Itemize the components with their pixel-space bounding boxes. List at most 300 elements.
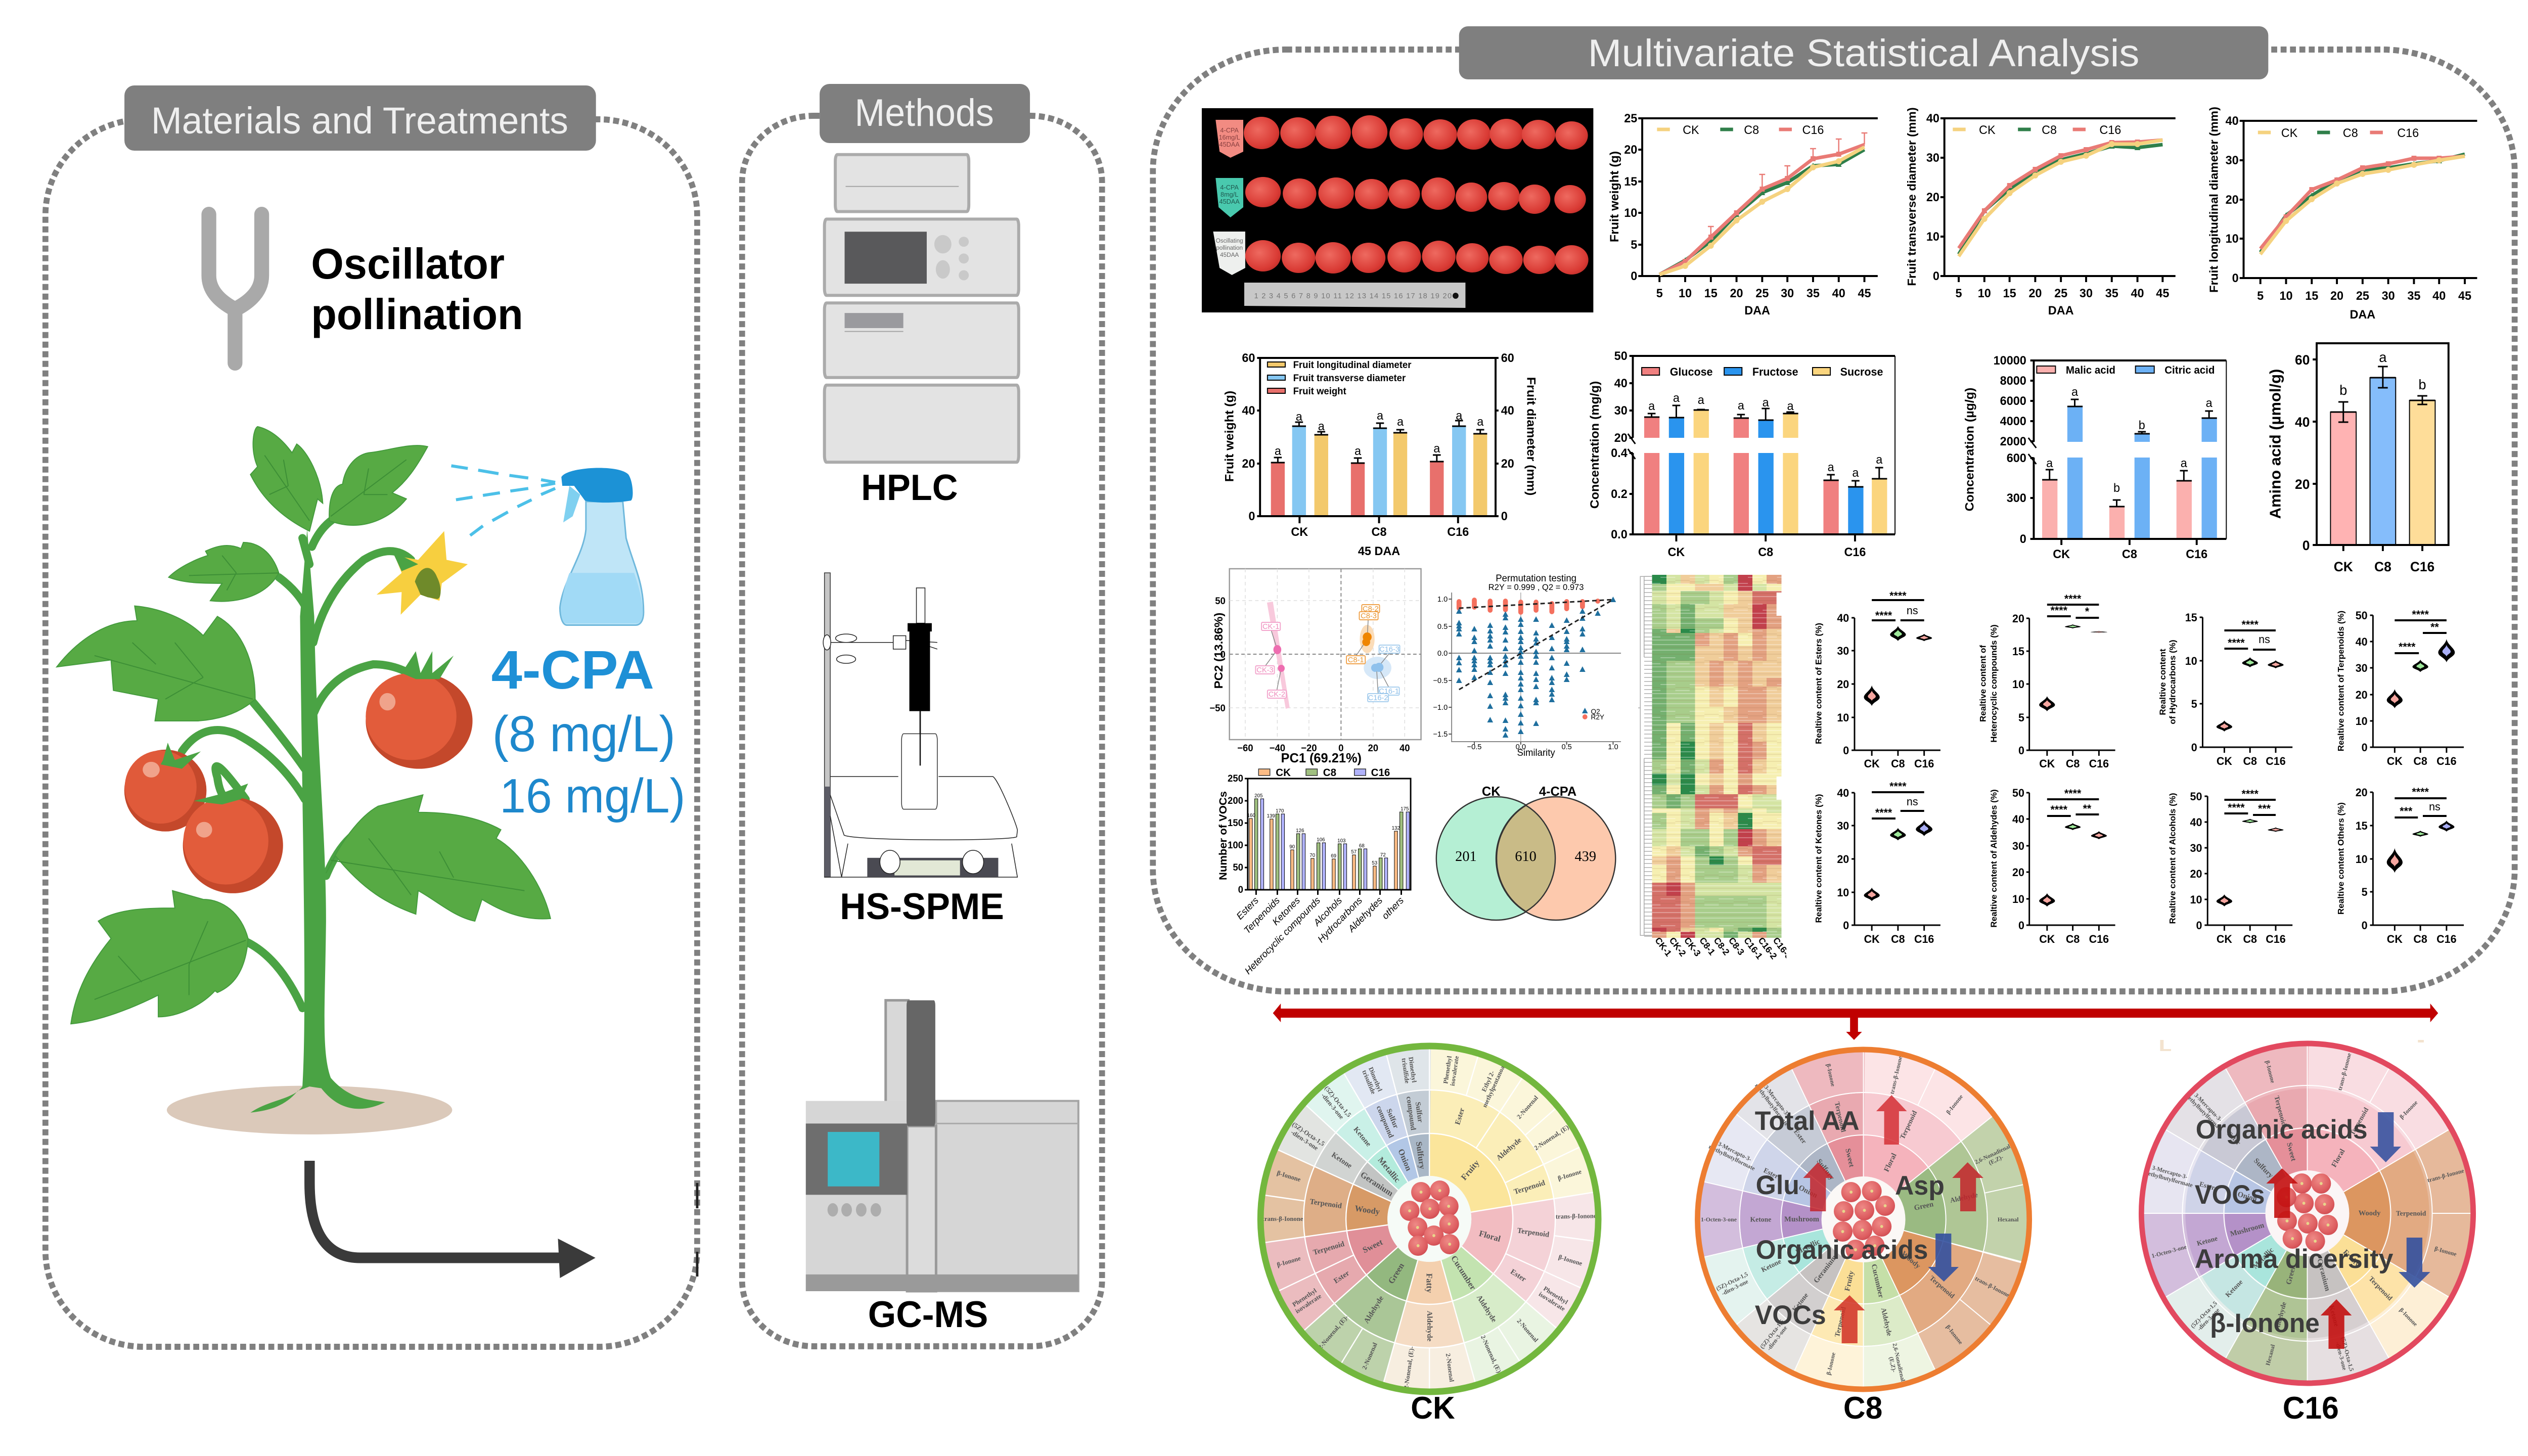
chart: fruit transverse diameter line: 0 xyxy=(1933,270,1939,283)
chart: others violin: ns xyxy=(2429,800,2441,813)
chart: fruit weight line xyxy=(1608,112,1878,317)
chart: esters violin: 0 xyxy=(1843,744,1849,757)
flavor wheel: CK: β-Ionone xyxy=(1557,1168,1583,1182)
chart: PCA scatter: 50 xyxy=(1215,596,1226,606)
chart: terpenoids violin: **** xyxy=(2412,608,2429,621)
flavor wheel: C16: Metallic xyxy=(2251,1246,2275,1270)
chart: 45 DAA fruit size bars: CK xyxy=(1291,526,1308,539)
chart: sugar concentration bars: a xyxy=(1648,400,1655,413)
chart: permutation test xyxy=(1433,573,1621,758)
chart: 45 DAA fruit size bars: a xyxy=(1275,445,1282,458)
flavor wheel: CK: methylpentanoate xyxy=(1481,1060,1508,1109)
text: 4-CPA doses xyxy=(491,639,685,823)
flavor wheel: C16: Onion xyxy=(2237,1190,2258,1204)
chart: VOC count bars: 68 xyxy=(1359,843,1365,849)
chart: sugar concentration bars: 0.2 xyxy=(1611,488,1628,501)
chart: heterocyclic violin: Realtive content of xyxy=(1978,645,1988,722)
chart: sugar concentration bars: 40 xyxy=(1614,377,1628,390)
chart: alcohols violin: **** xyxy=(2228,801,2245,814)
chart: PCA scatter: CK-2 xyxy=(1269,691,1285,699)
chart: ketones violin: 0 xyxy=(1843,919,1849,932)
chart: 45 DAA fruit size bars: 45 DAA xyxy=(1358,545,1400,558)
chart: sugar concentration bars: Glucose xyxy=(1670,366,1712,378)
chart: organic acid bars: b xyxy=(2139,419,2145,432)
chart: fruit longitudinal diameter line: Fruit longitudinal diameter (mm) xyxy=(2208,107,2221,293)
flavor wheel: C16: Ester xyxy=(2198,1180,2216,1192)
chart: PCA scatter: C8-3 xyxy=(1361,612,1377,620)
chart: VOC count bars: 100 xyxy=(1228,840,1243,850)
text: 4-CPA doses: 4-CPA xyxy=(491,639,654,700)
chart: PCA scatter: C8-2 xyxy=(1363,605,1379,613)
flavor wheel: C16: Ketone xyxy=(2224,1278,2244,1299)
chart: 45 DAA fruit size bars: Fruit weight xyxy=(1293,386,1346,396)
chart: aldehydes violin: C16 xyxy=(2089,933,2109,945)
text: oscillator pollination xyxy=(311,240,523,338)
chart: fruit weight line: 10 xyxy=(1679,287,1692,300)
chart: 45 DAA fruit size bars: Fruit longitudinal diameter xyxy=(1293,359,1412,370)
label: HS-SPME: HS-SPME xyxy=(840,886,1004,927)
flavor wheel: C16: trans-β-Ionone xyxy=(2426,1167,2465,1184)
flavor wheel: C8: 2,6-Nonadienal, xyxy=(1974,1142,2013,1166)
flavor wheel: CK: trans-β-Ionone xyxy=(1262,1215,1303,1222)
chart: organic acid bars: C16 xyxy=(2186,548,2207,561)
chart: esters violin: 30 xyxy=(1837,645,1849,657)
chart: fruit transverse diameter line: 40 xyxy=(1926,112,1939,125)
chart: 45 DAA fruit size bars: C16 xyxy=(1447,526,1469,539)
chart: sugar concentration bars: 0.4 xyxy=(1611,447,1628,460)
flavor wheel: CK: Terpenoid xyxy=(1513,1179,1547,1196)
chart: organic acid bars: a xyxy=(2181,457,2188,470)
chart: VOC count bars: Esters xyxy=(1234,895,1260,922)
text: C16 overlay labels: β-Ionone xyxy=(2210,1308,2320,1338)
flavor wheel: CK: (5Z)-Octa-1,5 xyxy=(1291,1121,1326,1148)
flavor wheel: C8: 2,6-Nonadienal, xyxy=(1891,1342,1907,1384)
chart: alcohols violin: **** xyxy=(2241,788,2259,800)
chart: fruit longitudinal diameter line: 40 xyxy=(2432,290,2446,303)
flavor wheel: CK: compound xyxy=(1375,1105,1395,1140)
flavor wheel: CK: 2-Nonenal, (E)- xyxy=(1403,1346,1415,1389)
flavor wheel: C16: Green xyxy=(2285,1264,2297,1286)
chart: VOC count bars: CK xyxy=(1276,767,1291,779)
chart: permutation test: −0.5 xyxy=(1467,743,1481,751)
chart: VOC count bars: Number of VOCs xyxy=(1216,791,1229,880)
chart: amino acid bars: b xyxy=(2418,377,2426,392)
label: CK: CK xyxy=(1411,1390,1455,1425)
chart: alcohols violin: Realtive content of Alcohols (%) xyxy=(2168,793,2178,924)
chart: fruit longitudinal diameter line: 10 xyxy=(2279,290,2293,303)
chart: fruit transverse diameter line: C8 xyxy=(2042,124,2057,137)
chart: heterocyclic violin: CK xyxy=(2039,757,2055,770)
chart: VOC count bars: 53 xyxy=(1372,860,1378,866)
flavor wheel: C8: -dien-3-one xyxy=(1766,1325,1788,1352)
photo: tomato fruit rows: 45DAA xyxy=(1220,198,1240,205)
flavor wheel: C8: 3-Mercapto-3- xyxy=(1763,1084,1791,1118)
ring sectors xyxy=(1223,1007,1637,1431)
chart: VOC count bars: 205 xyxy=(1254,793,1263,799)
chart: hydrocarbons violin: CK xyxy=(2217,755,2232,767)
chart: organic acid bars: a xyxy=(2071,386,2079,399)
chart: 45 DAA fruit size bars: Fruit transverse diameter xyxy=(1293,373,1406,383)
flavor wheel: C8: Floral xyxy=(1883,1152,1899,1173)
flavor wheel: C16: (5Z)-Octa-1,5 xyxy=(2189,1300,2219,1330)
chart: fruit longitudinal diameter line: 5 xyxy=(2257,290,2264,303)
chart: alcohols violin: *** xyxy=(2258,802,2271,815)
chart: others violin: C16 xyxy=(2436,933,2457,945)
chart: amino acid bars: C8 xyxy=(2374,559,2391,574)
flavor wheel: CK: Floral xyxy=(1478,1228,1502,1244)
flavor wheel: C8: Metallic xyxy=(1794,1238,1822,1257)
chart: fruit transverse diameter line: 20 xyxy=(1926,191,1939,204)
chart: fruit weight line: 20 xyxy=(1624,144,1637,157)
chart: PCA scatter: 20 xyxy=(1368,743,1378,753)
chart: fruit transverse diameter line: DAA xyxy=(2048,304,2074,317)
chart: permutation test: 0.0 xyxy=(1516,743,1526,751)
chart: aldehydes violin xyxy=(1989,787,2115,945)
chart: terpenoids violin: 20 xyxy=(2356,689,2368,701)
flavor wheel: C16: Ketone xyxy=(2196,1234,2218,1247)
text: oscillator pollination: pollination xyxy=(311,290,523,338)
chart: fruit weight line: 10 xyxy=(1624,207,1637,220)
chart: heterocyclic violin: 0 xyxy=(2018,744,2024,757)
chart: esters violin xyxy=(1814,589,1940,770)
chart: terpenoids violin: ** xyxy=(2430,621,2439,633)
flavor wheel: C8: β-Ionone xyxy=(1945,1093,1964,1116)
flavor wheel: C16: Ketone xyxy=(2328,1304,2340,1327)
chart: ketones violin: ns xyxy=(1907,795,1918,808)
chart: organic acid bars: Citric acid xyxy=(2164,365,2215,376)
chart: amino acid bars: 0 xyxy=(2303,538,2310,553)
flavor wheel: C16: Terpenoid xyxy=(2367,1275,2394,1302)
heading: multivariate statistical analysis xyxy=(1459,26,2268,79)
flavor wheel: C8: 3-Mercapto-3- xyxy=(1717,1140,1753,1163)
chart: sugar concentration bars: CK xyxy=(1668,546,1685,559)
chart: VOC count bars: 139 xyxy=(1267,813,1275,819)
chart: amino acid bars: a xyxy=(2379,349,2387,365)
chart: ketones violin: Realtive content of Ketones (%) xyxy=(1814,794,1823,923)
chart: ketones violin: 30 xyxy=(1837,820,1849,832)
chart: aldehydes violin: 20 xyxy=(2012,866,2024,879)
chart: esters violin: Realtive content of Esters (%) xyxy=(1814,623,1823,744)
chart: fruit longitudinal diameter line: C8 xyxy=(2343,127,2358,140)
chart: organic acid bars: 300 xyxy=(2007,492,2026,505)
chart: sugar concentration bars: Concentration (mg/g) xyxy=(1588,381,1602,509)
chart: esters violin: 10 xyxy=(1837,711,1849,724)
photo: tomato fruit rows: Oscillating xyxy=(1216,237,1243,244)
chart: fruit transverse diameter line: 25 xyxy=(2054,287,2067,300)
chart: 45 DAA fruit size bars: 20 xyxy=(1242,458,1255,471)
flavor wheel: C8: Woody xyxy=(1900,1250,1922,1270)
chart: fruit longitudinal diameter line: 15 xyxy=(2305,290,2318,303)
chart: others violin: C8 xyxy=(2413,933,2427,945)
icon: HPLC instrument xyxy=(825,155,1019,462)
chart: VOC count bars: 72 xyxy=(1380,852,1386,858)
chart: organic acid bars: Malic acid xyxy=(2066,365,2115,376)
flavor wheel: C8: (E,Z)- xyxy=(1988,1153,2004,1166)
chart: fruit transverse diameter line xyxy=(1906,107,2176,317)
flavor wheel: CK: 2-Nonenal xyxy=(1444,1353,1455,1383)
chart: Venn diagram: 4-CPA xyxy=(1539,785,1576,799)
label: GC-MS: GC-MS xyxy=(868,1294,988,1335)
heading: methods xyxy=(820,84,1030,143)
flavor wheel: CK: Terpenoid xyxy=(1309,1198,1343,1210)
chart: fruit longitudinal diameter line: CK xyxy=(2281,127,2297,140)
photo: tomato fruit rows: 45DAA xyxy=(1220,251,1239,258)
flavor wheel: CK: β-Ionone xyxy=(1276,1169,1301,1184)
flavor wheel: C8: Aldehyde xyxy=(1950,1191,1978,1204)
chart: others violin: 10 xyxy=(2356,853,2368,866)
chart: sugar concentration bars: a xyxy=(1852,467,1859,480)
flavor wheel: CK: Terpenoid xyxy=(1312,1240,1346,1257)
flavor wheel: C8: Mushroom xyxy=(1784,1215,1820,1223)
flavor wheel: C8: β-Ionone xyxy=(1945,1323,1964,1346)
flavor wheel: C8: Green xyxy=(1913,1200,1934,1212)
flavor wheel: C8: Ketone xyxy=(1750,1215,1771,1223)
chart: VOC count bars: 50 xyxy=(1233,862,1243,873)
chart: PCA scatter: −40 xyxy=(1270,743,1285,753)
flavor wheel: CK: Sweet xyxy=(1361,1237,1384,1255)
flavor wheel: C16: Terpenoid xyxy=(2349,1106,2370,1136)
label: C8: C8 xyxy=(1843,1390,1882,1425)
chart: Venn diagram: 439 xyxy=(1575,848,1596,864)
flavor wheel: CK: Green xyxy=(1386,1261,1406,1286)
flavor wheel: CK: Ester xyxy=(1509,1267,1527,1284)
flavor wheel: CK: Woody xyxy=(1354,1203,1381,1216)
chart: fruit longitudinal diameter line: 35 xyxy=(2407,290,2420,303)
chart: 45 DAA fruit size bars: 0 xyxy=(1248,510,1255,523)
chart: heatmap of VOCs: CK-3 xyxy=(1682,935,1703,959)
chart: fruit weight line: 15 xyxy=(1704,287,1718,300)
chart: Venn diagram: 201 xyxy=(1455,848,1477,864)
chart: fruit weight line: C8 xyxy=(1744,124,1759,137)
flavor wheel: CK: β-Ionone xyxy=(1558,1253,1583,1267)
chart: sugar concentration bars: Sucrose xyxy=(1840,366,1883,378)
chart: PCA scatter: −60 xyxy=(1237,743,1253,753)
chart: sugar concentration bars: 20 xyxy=(1614,432,1628,445)
photo: tomato fruit rows: 16mg/L xyxy=(1218,133,1240,141)
chart: ketones violin: **** xyxy=(1875,806,1892,819)
chart: hydrocarbons violin: C16 xyxy=(2266,755,2286,767)
chart: 45 DAA fruit size bars: a xyxy=(1397,416,1404,429)
chart: VOC count bars: 70 xyxy=(1310,853,1316,858)
chart: heatmap of VOCs: C16-2 xyxy=(1756,935,1779,961)
flavor wheel: C8: Sweet xyxy=(1843,1148,1856,1168)
chart: heatmap of VOCs: CK-1 xyxy=(1653,935,1674,959)
chart: others violin: 5 xyxy=(2362,886,2368,898)
chart: fruit transverse diameter line: CK xyxy=(1979,124,1996,137)
chart: 45 DAA fruit size bars: Fruit weight (g) xyxy=(1223,391,1236,482)
chart: fruit weight line: 0 xyxy=(1631,270,1637,283)
text: 4-CPA doses: (8 mg/L) xyxy=(492,706,675,762)
chart: PCA scatter: −50 xyxy=(1209,703,1226,713)
icon: tuning fork xyxy=(209,214,262,363)
chart: terpenoids violin: C8 xyxy=(2413,755,2427,767)
chart: aldehydes violin: 30 xyxy=(2012,840,2024,852)
chart: fruit longitudinal diameter line: 45 xyxy=(2458,290,2471,303)
chart: 45 DAA fruit size bars: a xyxy=(1456,410,1463,423)
chart: amino acid bars: b xyxy=(2339,382,2347,398)
chart: amino acid bars: C16 xyxy=(2410,559,2434,574)
chart: fruit transverse diameter line: 5 xyxy=(1956,287,1962,300)
chart: fruit longitudinal diameter line xyxy=(2208,107,2477,322)
chart: PCA scatter: C8-1 xyxy=(1348,656,1364,664)
chart: PCA scatter: PC1 (69.21%) xyxy=(1281,751,1362,765)
chart: 45 DAA fruit size bars: 40 xyxy=(1242,404,1255,418)
chart: Venn diagram: 610 xyxy=(1515,848,1537,864)
chart: heterocyclic violin: 10 xyxy=(2012,678,2024,691)
chart: permutation test: Permutation testing xyxy=(1496,573,1576,583)
chart: hydrocarbons violin: C8 xyxy=(2243,755,2257,767)
chart: heatmap of VOCs: C16-3 xyxy=(1771,935,1794,961)
photo: tomato fruit rows xyxy=(1202,108,1593,312)
chart: organic acid bars: a xyxy=(2206,397,2213,410)
chart: PCA scatter: CK-1 xyxy=(1262,623,1279,631)
text: 4-CPA doses: 16 mg/L) xyxy=(500,769,685,823)
panel: multivariate statistical analysis xyxy=(1153,26,2515,991)
flavor wheel: CK: isovalerate xyxy=(1294,1292,1323,1315)
flavor wheel: C16: Terpenoid xyxy=(2396,1209,2426,1217)
chart: fruit longitudinal diameter line: DAA xyxy=(2350,308,2375,322)
chart: terpenoids violin: 30 xyxy=(2356,662,2368,674)
chart: aldehydes violin: 50 xyxy=(2012,787,2024,799)
flavor wheel: C16 xyxy=(2112,1013,2503,1414)
chart: sugar concentration bars: 50 xyxy=(1614,350,1628,363)
chart: VOC count bars: others xyxy=(1380,895,1406,921)
flavor wheel: C16: (5Z)-Octa-1,5 xyxy=(2340,1336,2355,1372)
chart: PCA scatter: 40 xyxy=(1400,743,1410,753)
chart: alcohols violin: 10 xyxy=(2190,893,2202,906)
chart: hydrocarbons violin: 10 xyxy=(2185,655,2197,667)
chart: fruit transverse diameter line: Fruit transverse diameter (mm) xyxy=(1906,107,1919,286)
chart: permutation test: Similarity xyxy=(1517,747,1555,758)
chart: others violin: CK xyxy=(2387,933,2403,945)
chart: fruit longitudinal diameter line: 0 xyxy=(2232,272,2239,285)
flavor wheel: CK: Aldehyde xyxy=(1363,1294,1385,1325)
flavor wheel: CK xyxy=(1223,1007,1637,1431)
chart: terpenoids violin: C16 xyxy=(2436,755,2457,767)
chart: organic acid bars: 2000 xyxy=(2000,435,2026,448)
flavor wheel: CK: trisulfide xyxy=(1401,1058,1411,1084)
chart: organic acid bars: a xyxy=(2046,457,2053,470)
chart: sugar concentration bars: Fructose xyxy=(1752,366,1798,378)
chart: fruit transverse diameter line: 30 xyxy=(1926,152,1939,165)
chart: organic acid bars: b xyxy=(2113,482,2120,495)
chart: alcohols violin: 30 xyxy=(2190,842,2202,854)
chart: sugar concentration bars: 0.0 xyxy=(1611,528,1628,541)
chart: permutation test: 0.5 xyxy=(1437,623,1448,631)
flavor wheel: C16: Hexanal xyxy=(2264,1343,2276,1367)
chart: hydrocarbons violin: 5 xyxy=(2191,698,2197,710)
flavor wheel: CK: trans-β-Ionone xyxy=(1556,1212,1597,1220)
chart: fruit transverse diameter line: 10 xyxy=(1926,231,1939,244)
flavor wheel: C8: Terpenoid xyxy=(1899,1109,1918,1141)
flavor wheel: CK: Ketone xyxy=(1330,1151,1353,1170)
chart: VOC count bars: 160 xyxy=(1247,813,1255,818)
chart: fruit longitudinal diameter line: 30 xyxy=(2382,290,2395,303)
chart: heterocyclic violin: **** xyxy=(2051,604,2068,617)
chart: organic acid bars: C8 xyxy=(2122,548,2137,561)
chart: 45 DAA fruit size bars: a xyxy=(1318,420,1325,433)
text: C16 overlay labels: Aroma dicersity xyxy=(2195,1244,2393,1274)
flavor wheel: C8: (5Z)-Octa-1,5 xyxy=(1758,1318,1785,1350)
flavor wheel: CK: Fatty xyxy=(1425,1273,1434,1293)
chart: sugar concentration bars: a xyxy=(1673,392,1680,405)
chart: heterocyclic violin: Heterocyclic compounds (%) xyxy=(1989,624,1999,743)
chart: esters violin: **** xyxy=(1889,589,1907,602)
chart: VOC count bars: C16 xyxy=(1371,767,1390,779)
text: oscillator pollination: Oscillator xyxy=(311,240,505,288)
chart: alcohols violin xyxy=(2168,788,2292,945)
flavor wheel: CK: Dimethyl xyxy=(1407,1057,1418,1083)
chart: heatmap of VOCs: CK-2 xyxy=(1667,935,1688,959)
chart: VOC count bars: Hydrocarbons xyxy=(1316,895,1364,944)
chart: fruit longitudinal diameter line: 20 xyxy=(2226,194,2239,207)
chart: 45 DAA fruit size bars: 0 xyxy=(1501,510,1508,523)
chart: PCA scatter: C16-2 xyxy=(1368,694,1388,702)
chart: alcohols violin: C16 xyxy=(2266,933,2286,945)
flavor wheel: C16: Ester xyxy=(2226,1130,2242,1147)
chart: terpenoids violin xyxy=(2336,608,2464,767)
chart: fruit weight line: 15 xyxy=(1624,175,1637,189)
chart: 45 DAA fruit size bars: 20 xyxy=(1501,458,1514,471)
chart: VOC count bars: 200 xyxy=(1228,795,1243,806)
flavor wheel: CK: Aldehyde xyxy=(1475,1294,1498,1324)
flavor wheel: CK: 2-Nonenal xyxy=(1515,1094,1540,1120)
chart: ketones violin: 40 xyxy=(1837,787,1849,799)
chart: ketones violin: **** xyxy=(1889,780,1907,793)
chart: VOC count bars: C8 xyxy=(1323,767,1336,779)
chart: sugar concentration bars: a xyxy=(1738,399,1745,413)
photo: tomato fruit rows: 1 2 3 4 5 6 7 8 9 10 11 12 13 14 15 16 17 18 19 20 xyxy=(1254,292,1452,300)
chart: aldehydes violin: **** xyxy=(2051,803,2068,816)
flavor wheel: C8: Ester xyxy=(1763,1166,1780,1180)
flavor wheel: CK: Ester xyxy=(1454,1107,1466,1126)
flavor wheel: C8: methylbutylformate xyxy=(1707,1143,1756,1172)
chart: others violin xyxy=(2336,786,2464,945)
chart: organic acid bars: CK xyxy=(2053,548,2070,561)
chart: 45 DAA fruit size bars: 60 xyxy=(1242,352,1255,365)
panel: methods xyxy=(742,84,1102,1346)
flavor wheel: C8: Aldehyde xyxy=(1880,1307,1893,1337)
flavor wheel: C8: Onion xyxy=(1797,1184,1819,1200)
chart: permutation test: R2Y = 0.999 , Q2 = 0.973 xyxy=(1488,582,1584,592)
flavor wheel: C16: trans-β-Ionone xyxy=(2336,1052,2353,1091)
chart: fruit weight line: 40 xyxy=(1832,287,1845,300)
flavor wheel: CK: Onion xyxy=(1396,1147,1414,1172)
flavor wheel: C16: Sweet xyxy=(2285,1142,2297,1162)
chart: esters violin: 40 xyxy=(1837,612,1849,624)
flavor wheel: C8: β-Ionone xyxy=(1825,1063,1837,1087)
chart: VOC count bars: 90 xyxy=(1289,844,1295,850)
panel: materials and treatments xyxy=(46,85,697,1347)
chart: hydrocarbons violin: **** xyxy=(2241,618,2259,631)
flavor wheel: C8: Ketone xyxy=(1760,1257,1782,1273)
chart: esters violin: C16 xyxy=(1914,757,1934,770)
chart: VOC count bars: 170 xyxy=(1276,808,1284,814)
chart: others violin: *** xyxy=(2400,805,2413,817)
chart: 45 DAA fruit size bars xyxy=(1223,352,1538,558)
chart: heatmap of VOCs xyxy=(1638,575,1794,961)
chart: permutation test: −1.5 xyxy=(1433,731,1448,739)
chart: VOC count bars: 69 xyxy=(1331,853,1337,859)
flavor wheel: C16: β-Ionone xyxy=(2264,1060,2277,1084)
chart: sugar concentration bars: C16 xyxy=(1844,546,1866,559)
photo: tomato fruit rows: pollination xyxy=(1216,244,1243,251)
chart: PCA scatter xyxy=(1209,569,1421,765)
chart: fruit transverse diameter line: 30 xyxy=(2080,287,2093,300)
flavor wheel: CK: Dimethyl xyxy=(1367,1066,1384,1093)
arrow: red double-headed connector xyxy=(1273,1004,2438,1040)
chart: heterocyclic violin: C8 xyxy=(2066,757,2080,770)
